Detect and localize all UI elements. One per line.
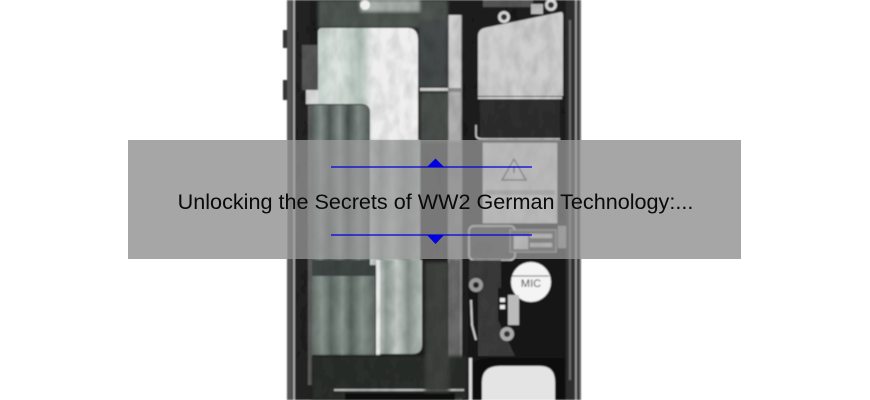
mottled grime texture [296,0,574,400]
label circle [511,262,551,302]
lower right board [468,224,568,364]
right rail [566,0,575,400]
speaker module [468,358,565,400]
pale upper panel [318,28,418,140]
phone body [287,0,581,400]
lower dark band [312,356,467,400]
vertical silver strip [448,15,462,400]
pale central panel [370,140,420,265]
sticker with warning in band area [483,143,557,223]
left column details [296,0,310,400]
upper mottled board [318,0,448,28]
title: Unlocking the Secrets of WW2 German Technology:... [178,189,693,214]
translucent title band [128,140,741,259]
blue ornament lines and diamond [331,158,532,244]
photo: disassembled phone interior: MIC [521,278,541,290]
striped left panel [312,105,370,140]
screws [469,278,483,292]
right battery shield [478,12,563,96]
top screws and connector [498,11,510,23]
